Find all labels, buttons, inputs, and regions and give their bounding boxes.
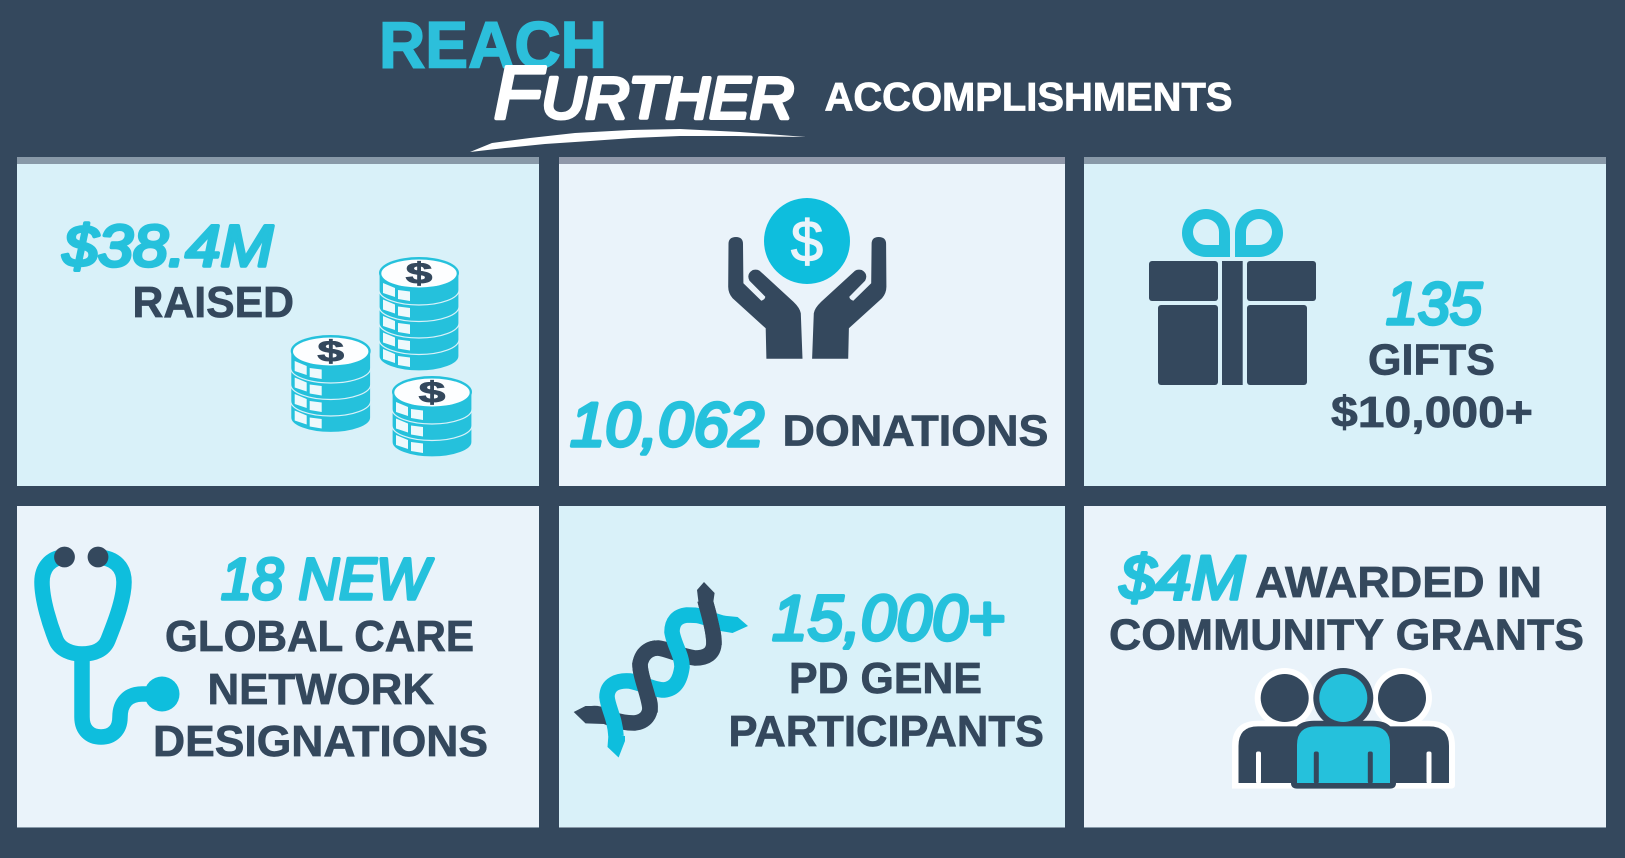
coin stack: right [392, 376, 472, 457]
panel: raised [17, 157, 539, 486]
label: RAISED: RAISED [132, 278, 294, 327]
panel: gifts [1084, 157, 1606, 486]
coin stack: right: $ [419, 376, 445, 409]
icon: people group [1232, 668, 1455, 789]
stat: $4M: $4M [1119, 544, 1245, 613]
panel: community grants [1084, 506, 1606, 828]
panel: PD gene [559, 506, 1065, 828]
brush underline [470, 129, 806, 152]
icon: stethoscope [42, 547, 180, 737]
label: $10,000+: $10,000+ [1331, 388, 1533, 437]
label: GIFTS: GIFTS [1368, 336, 1495, 384]
coin stack: left [291, 335, 371, 432]
icon: gift box [1149, 209, 1316, 385]
label: AWARDED IN: AWARDED IN [1255, 558, 1542, 607]
stat: $38.4M: $38.4M [62, 214, 274, 279]
stat: 15,000+: 15,000+ [772, 582, 1005, 654]
label: NETWORK: NETWORK [208, 665, 434, 714]
stat: 135: 135 [1386, 271, 1482, 337]
label: DONATIONS: DONATIONS [782, 406, 1048, 456]
icon: DNA helix [574, 582, 748, 758]
title word: REACH: REACH [379, 8, 607, 82]
panel: global care network [17, 506, 539, 828]
coin stack: left: $ [317, 335, 344, 368]
icon: hands holding coin [728, 198, 886, 359]
coin stack: upper [379, 257, 459, 371]
icon: hands holding coin: $ [791, 209, 823, 274]
title word: FURTHER: FURTHER [494, 51, 794, 134]
icon: coin stacks [291, 257, 472, 457]
label: PD GENE: PD GENE [789, 654, 982, 703]
label: GLOBAL CARE: GLOBAL CARE [165, 612, 474, 661]
stat: 18 NEW: 18 NEW [221, 547, 434, 612]
panel: donations [559, 157, 1065, 486]
stat: 10,062: 10,062 [570, 391, 764, 460]
label: COMMUNITY GRANTS: COMMUNITY GRANTS [1109, 610, 1584, 660]
coin stack: upper: $ [406, 257, 432, 290]
label: PARTICIPANTS: PARTICIPANTS [728, 707, 1044, 756]
title word: ACCOMPLISHMENTS: ACCOMPLISHMENTS [824, 76, 1232, 120]
title [379, 8, 1232, 152]
label: DESIGNATIONS: DESIGNATIONS [153, 717, 488, 766]
